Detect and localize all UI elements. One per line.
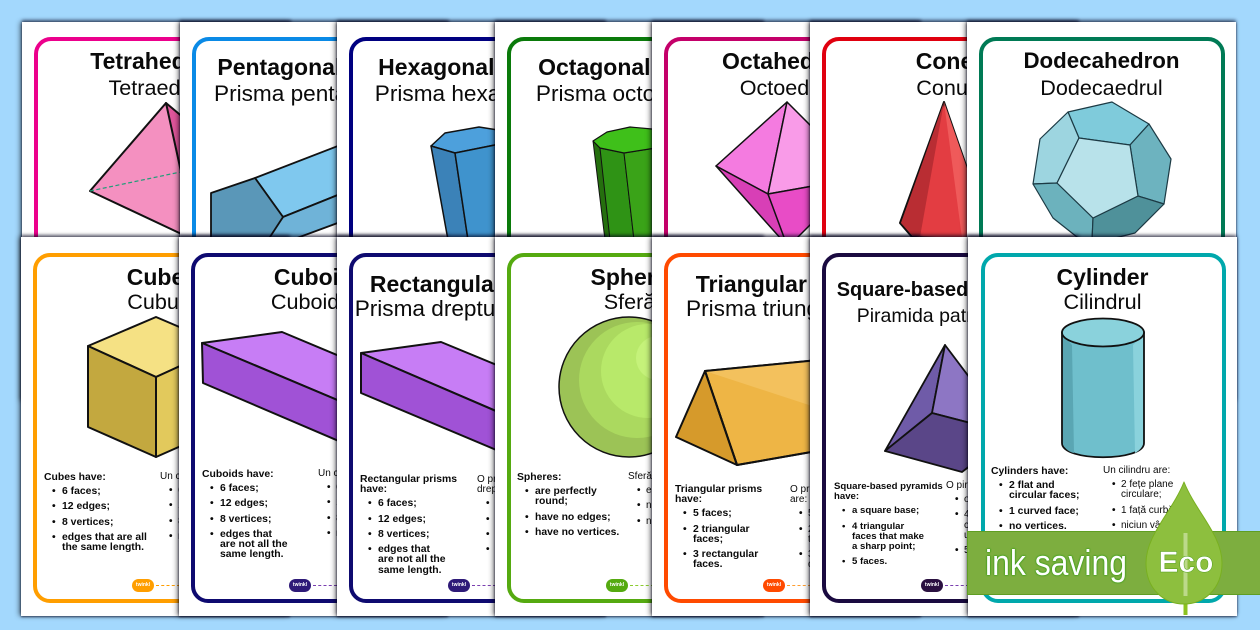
text: English facts: 3 rectangular: [693, 549, 758, 560]
text: English facts: Rectangular prisms: [360, 474, 457, 485]
text: Romanian facts: 6 fețe;: [495, 498, 523, 509]
text: English facts: [675, 484, 762, 570]
text: Romanian facts: [1103, 465, 1177, 531]
poster: triangular prism: [652, 237, 921, 616]
text: Romanian facts: niciun vârf.: [646, 516, 694, 527]
subheading: Piramida patrulateră: [857, 305, 1032, 327]
icon: cuboid: [201, 331, 337, 442]
logo: twinkl: [136, 582, 150, 588]
icon: octagonal prism: [592, 126, 652, 237]
text: English facts: 8 vertices;: [62, 517, 113, 528]
subheading: Conul: [916, 75, 973, 100]
heading: Octagonal Prism: [538, 54, 721, 80]
poster: octagonal prism: [495, 22, 764, 401]
text: Romanian facts: muchii inegale.: [495, 544, 562, 555]
text: English facts: Triangular prisms: [675, 484, 762, 495]
icon: hexagonal prism: [430, 126, 495, 237]
heading: Tetrahedron: [90, 48, 223, 74]
text: Romanian facts: 12 muchii;: [336, 497, 382, 508]
text: English facts: a sharp point;: [852, 541, 915, 552]
text: Romanian facts: 5 fețe.: [964, 545, 992, 556]
text: English facts: [44, 472, 147, 553]
text: Romanian facts: 12 muchii;: [495, 514, 541, 525]
subheading: Octoedrul: [740, 75, 833, 100]
text: Romanian facts: Un cub are:: [160, 471, 212, 482]
text: Romanian facts: 1 față curbă;: [1121, 505, 1177, 516]
text: English facts: edges that are all: [62, 532, 147, 543]
text: English facts: the same length.: [62, 542, 144, 553]
heading: Pentagonal Prism: [217, 54, 412, 80]
icon: cylinder: [1061, 318, 1145, 458]
poster: cuboid: [179, 237, 448, 616]
text: English facts: 12 edges;: [62, 501, 110, 512]
text: English facts: 8 vertices;: [378, 529, 429, 540]
text: English facts: are not all the: [378, 554, 446, 565]
text: English facts: 6 faces;: [220, 483, 259, 494]
text: English facts: 12 edges;: [220, 498, 268, 509]
logo: twinkl: [767, 582, 781, 588]
text: English facts: are not all the: [220, 539, 288, 550]
text: Romanian facts: circulare;: [1121, 489, 1162, 500]
text: English facts: are perfectly: [535, 486, 597, 497]
text: Romanian facts: Sferă are:: [628, 471, 672, 482]
heading: Square-based Pyramid: [837, 279, 1052, 301]
text: English facts: [517, 472, 619, 538]
logo: twinkl: [610, 582, 624, 588]
text: Romanian facts: [628, 471, 704, 527]
text: English facts: 2 flat and: [1009, 480, 1055, 491]
text: English facts: 2 triangular: [693, 524, 750, 535]
heading: Sphere: [590, 264, 668, 290]
text: English facts: [202, 469, 288, 560]
icon: cube: [87, 316, 179, 458]
icon: octahedron: [715, 101, 810, 237]
text: English facts: Cuboids have:: [202, 469, 274, 480]
poster: cylinder: [968, 237, 1237, 616]
text: English facts: Spheres:: [517, 472, 561, 483]
text: Romanian facts: 2 fețe plane: [1121, 479, 1173, 490]
text: Romanian facts: 8 vârfuri;: [336, 513, 375, 524]
icon: dodecahedron: [1032, 101, 1172, 237]
subheading: Prisma octogonală: [536, 81, 723, 106]
text: Romanian facts: dreptunghiulare.: [808, 559, 880, 570]
text: Romanian facts: [477, 474, 567, 555]
subheading: Prisma dreptunghiulară: [355, 296, 588, 321]
text: Romanian facts: are:: [790, 494, 807, 505]
text: English facts: same length.: [378, 565, 442, 576]
subheading: Cubul: [127, 289, 184, 314]
logo: twinkl: [452, 582, 466, 588]
text: Romanian facts: nicio muchie;: [646, 500, 704, 511]
text: Romanian facts: 12 muchii;: [178, 500, 224, 511]
icon: sphere: [558, 316, 652, 458]
text: English facts: have no edges;: [535, 512, 611, 523]
poster: octahedron: [652, 22, 921, 401]
logo: twinkl: [293, 582, 307, 588]
banner: ink saving: [967, 531, 1260, 595]
heading: Cone: [916, 48, 973, 74]
text: Romanian facts: 6 fețe;: [336, 482, 364, 493]
text: English facts: Cylinders have:: [991, 466, 1068, 477]
text: Romanian facts: [318, 468, 403, 539]
poster: hexagonal prism: [337, 22, 606, 401]
poster: square-based pyramid: [810, 237, 1079, 616]
text: English facts: 8 vertices;: [220, 514, 271, 525]
banner text: ink saving: [985, 542, 1127, 583]
icon: pentagonal prism: [210, 146, 337, 237]
text: English facts: faces.: [693, 559, 722, 570]
text: English facts: 5 faces.: [852, 556, 887, 567]
text: Romanian facts: O prismă: [790, 484, 831, 495]
text: English facts: 12 edges;: [378, 514, 426, 525]
text: English facts: edges that: [378, 544, 430, 555]
heading: Cube: [127, 264, 184, 290]
subheading: Tetraedrul: [108, 75, 205, 100]
heading: Cuboid: [274, 264, 353, 290]
icon: cone: [899, 101, 967, 237]
text: Romanian facts: Un cilindru are:: [1103, 465, 1170, 476]
poster: tetrahedron: [22, 22, 291, 401]
text: English facts: 5 faces;: [693, 508, 732, 519]
text: Romanian facts: o bază pătrată;: [964, 494, 1031, 505]
text: English facts: same length.: [220, 549, 284, 560]
text: Romanian facts: 8 vârfuri;: [178, 516, 217, 527]
heading: Triangular Prism: [696, 271, 877, 297]
text: Romanian facts: un vârf;: [964, 530, 997, 541]
text: Romanian facts: 2 fețe: [808, 524, 833, 535]
heading: Rectangular Prism: [370, 271, 573, 297]
text: Romanian facts: O prismă: [477, 474, 518, 485]
text: English facts: round;: [535, 496, 568, 507]
text: Romanian facts: care formează: [964, 520, 1028, 531]
text: English facts: have:: [675, 494, 702, 505]
text: Romanian facts: dreptunghiulară are:: [477, 484, 567, 495]
text: Romanian facts: 3 fețe: [808, 549, 833, 560]
subheading: Sferă: [604, 289, 655, 314]
text: Romanian facts: O piramidă are:: [946, 480, 1015, 491]
subheading: Cuboidul: [271, 289, 356, 314]
subheading: Prisma triunghiulară: [686, 296, 887, 321]
text: Romanian facts: [946, 480, 1047, 556]
heading: Dodecahedron: [1023, 48, 1180, 73]
text: English facts: faces;: [693, 534, 723, 545]
text: Romanian facts: Un cuboid are:: [318, 468, 383, 479]
poster: cube: [21, 237, 290, 616]
poster: cone: [810, 22, 1079, 401]
poster: pentagonal prism: [180, 22, 449, 401]
text: Romanian facts: 8 vârfuri;: [495, 529, 534, 540]
text: English facts: a square base;: [852, 505, 919, 516]
text: English facts: circular faces;: [1009, 490, 1079, 501]
text: English facts: 4 triangular: [852, 521, 904, 532]
text: English facts: Square-based pyramids: [834, 481, 943, 492]
icon: pyramid: [884, 344, 968, 473]
text: English facts: have no vertices.: [535, 527, 619, 538]
text: Romanian facts: 5 fețe;: [808, 508, 836, 519]
poster: rectangular prism: [337, 237, 606, 616]
text: English facts: edges that: [220, 529, 272, 540]
text: English facts: [991, 466, 1079, 532]
text: Romanian facts: muchii inegale.: [336, 528, 403, 539]
logo: twinkl: [925, 582, 939, 588]
text: Romanian facts: [160, 471, 237, 542]
subheading: Prisma hexagonală: [375, 81, 568, 106]
heading: Hexagonal Prism: [378, 54, 565, 80]
text: English facts: have:: [834, 491, 859, 502]
heading: Cylinder: [1056, 264, 1149, 290]
text: Romanian facts: niciun vârf.: [1121, 520, 1169, 531]
text: English facts: 6 faces;: [62, 486, 101, 497]
heading: Octahedron: [722, 48, 851, 74]
text: English facts: [360, 474, 457, 576]
subheading: Cilindrul: [1063, 289, 1142, 314]
text: Romanian facts: muchii egale.: [178, 531, 237, 542]
text: English facts: Cubes have:: [44, 472, 106, 483]
text: Romanian facts: 4 fețe triunghiulare: [964, 509, 1047, 520]
text: Romanian facts: 6 fețe;: [178, 485, 206, 496]
text: Romanian facts: triunghiulare;: [808, 534, 866, 545]
poster: dodecahedron: [967, 22, 1236, 401]
text: English facts: 1 curved face;: [1009, 506, 1079, 517]
text: English facts: have:: [360, 484, 387, 495]
text: English facts: no vertices.: [1009, 521, 1067, 532]
subheading: Prisma pentagonală: [214, 81, 415, 106]
icon: triangular prism: [675, 360, 810, 466]
text: English facts: 6 faces;: [378, 498, 417, 509]
subheading: Dodecaedrul: [1040, 75, 1163, 100]
text: English facts: faces that make: [852, 531, 924, 542]
icon: rectangular prism: [360, 341, 495, 450]
icon: eco leaf: Eco: [1158, 546, 1214, 579]
text: Romanian facts: este rotundă;: [646, 485, 704, 496]
icon: eco leaf: [1146, 482, 1222, 615]
poster: sphere: [495, 237, 764, 616]
text: English facts: [834, 481, 943, 567]
icon: tetrahedron: [89, 102, 180, 234]
text: Romanian facts: [790, 484, 880, 570]
